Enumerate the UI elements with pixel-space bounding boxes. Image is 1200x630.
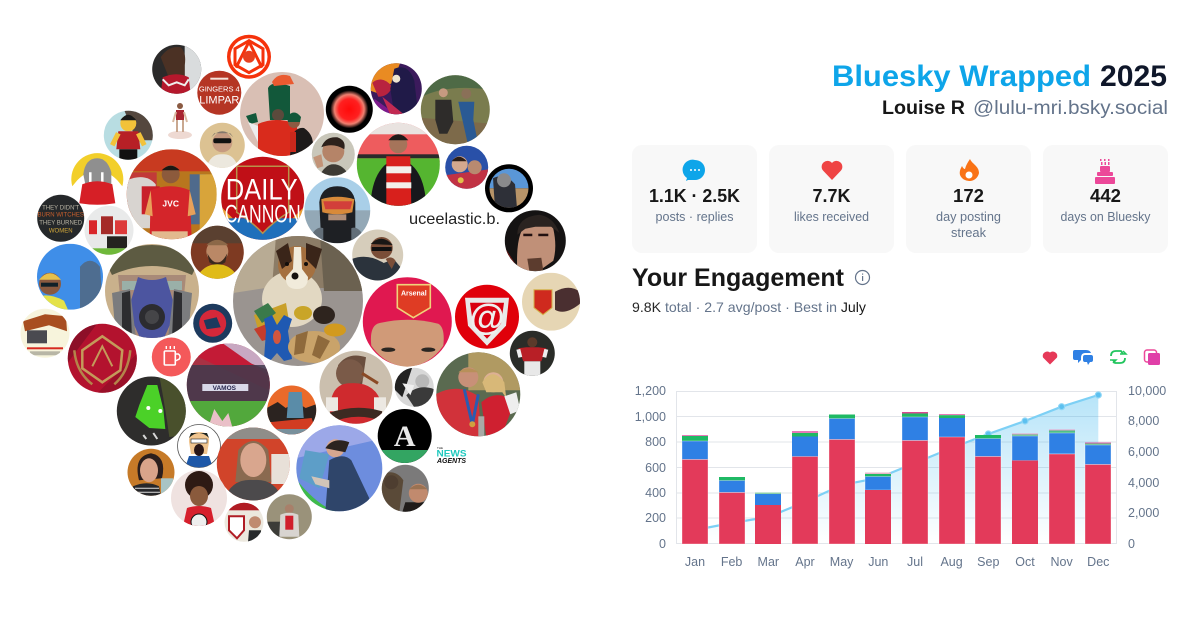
avatar: footballer portrait bbox=[504, 210, 566, 272]
panel: posts and replies bbox=[632, 145, 757, 253]
avatar: Daily Cannon bbox=[221, 156, 305, 240]
month labels: Sep bbox=[977, 555, 999, 569]
avatar: cartoon woman in Arsenal kit bbox=[171, 470, 227, 530]
bar: Dec bbox=[1085, 442, 1111, 544]
engagement summary: 9.8K total · 2.7 avg/post · Best in July bbox=[632, 299, 866, 315]
avatar: cannon crest logo bbox=[227, 35, 271, 79]
panel: likes received: 7.7K bbox=[812, 186, 850, 206]
bar: Nov bbox=[1049, 430, 1075, 544]
avatar: purple painted couple bbox=[370, 62, 422, 115]
avatar: man with Arsenal scarf in stadium bbox=[356, 122, 440, 206]
avatar: beige egg with crest bbox=[522, 273, 580, 331]
panel: posts and replies: posts · replies bbox=[656, 209, 734, 224]
avatar: man in respirator mask bbox=[105, 244, 199, 338]
month labels: Aug bbox=[940, 555, 963, 569]
avatar: navy badge bbox=[193, 304, 232, 343]
avatar: woman with red and grey background bbox=[216, 427, 290, 501]
bar: Mar bbox=[755, 492, 781, 544]
avatar: at-sign crest bbox=[455, 285, 519, 349]
user name and handle: Louise R bbox=[882, 98, 965, 119]
avatar: stadium banner: VAMOS bbox=[213, 385, 237, 392]
panel: day posting streak: 172 bbox=[953, 186, 984, 206]
month labels: Mar bbox=[758, 555, 779, 569]
left axis labels: 200 bbox=[645, 511, 666, 525]
avatar: witches poster: THEY DIDN'T bbox=[42, 205, 80, 211]
panel: likes received: likes received bbox=[794, 209, 869, 224]
avatar: shouting cartoon man bbox=[178, 424, 220, 468]
avatar: team with dog bbox=[84, 205, 134, 256]
engagement chart bbox=[635, 384, 1166, 569]
panel: days on Bluesky bbox=[1043, 145, 1168, 253]
avatar: two hikers bbox=[420, 75, 490, 145]
grid bbox=[676, 391, 1116, 544]
avatar: witches poster: BURN WITCHES bbox=[38, 212, 84, 218]
avatar: The News Agents bbox=[436, 446, 466, 465]
avatar: couple with medal bbox=[435, 351, 521, 437]
avatar: smiling man bbox=[311, 132, 355, 176]
icon: chat bubble bbox=[683, 160, 705, 181]
bar: Jun bbox=[865, 472, 891, 544]
panel: day posting streak bbox=[906, 145, 1031, 253]
month labels: Jun bbox=[868, 555, 888, 569]
avatar: Daily Cannon: DAILY bbox=[226, 173, 298, 206]
avatar: crowd, man in JVC shirt: JVC bbox=[162, 198, 179, 208]
clipped handle label: uceelastic.b. bbox=[409, 211, 500, 228]
avatar: man in sunglasses bbox=[199, 122, 245, 168]
avatar: bearded man in yellow bbox=[190, 225, 244, 279]
avatar: otter smoking a cigar bbox=[319, 350, 393, 424]
avatar: green leaf face bbox=[116, 376, 186, 446]
avatar cloud bbox=[20, 35, 580, 542]
avatar: child in Arsenal hat: Arsenal bbox=[401, 291, 427, 298]
month labels: Feb bbox=[721, 555, 742, 569]
avatar: witches poster bbox=[37, 194, 85, 242]
cumulative area and line bbox=[695, 392, 1101, 544]
icon: flame bbox=[960, 159, 979, 181]
panel: days on Bluesky: 442 bbox=[1090, 186, 1121, 206]
bar: Oct bbox=[1012, 434, 1038, 544]
avatar: The News Agents: NEWS bbox=[436, 448, 466, 460]
avatar: black ring with dog bbox=[485, 164, 533, 212]
avatar: The News Agents: AGENTS bbox=[436, 458, 466, 465]
right axis labels: 4,000 bbox=[1128, 476, 1159, 490]
icon: replies bbox=[1073, 350, 1093, 365]
user name and handle bbox=[882, 98, 1168, 119]
bar: Aug bbox=[939, 414, 965, 544]
icon: heart bbox=[822, 161, 842, 180]
panel: likes received bbox=[769, 145, 894, 253]
avatar: man with glasses leaning bbox=[352, 229, 404, 281]
right axis labels: 8,000 bbox=[1128, 414, 1159, 428]
panel: day posting streak: day posting bbox=[936, 209, 1001, 224]
avatar: witches poster: WOMEN bbox=[49, 228, 73, 234]
avatar: retro newspaper tiger bbox=[20, 308, 70, 358]
month labels: Jan bbox=[685, 555, 705, 569]
icon: birthday cake bbox=[1095, 159, 1115, 184]
avatar: subbuteo figure bbox=[168, 103, 192, 139]
icon: like heart bbox=[1043, 352, 1057, 364]
left axis labels: 400 bbox=[645, 486, 666, 500]
panel: posts and replies: 1.1K · 2.5K bbox=[649, 186, 740, 206]
avatar: at-sign crest: @ bbox=[469, 297, 505, 338]
title: Bluesky Wrapped bbox=[832, 60, 1091, 93]
avatar: skier with goggles bbox=[304, 177, 370, 243]
bar: Jul bbox=[902, 412, 928, 544]
month labels: Jul bbox=[907, 555, 923, 569]
panel: days on Bluesky: days on Bluesky bbox=[1060, 209, 1151, 224]
icon: repost bbox=[1110, 351, 1126, 363]
right axis labels: 6,000 bbox=[1128, 445, 1159, 459]
left axis labels: 0 bbox=[659, 537, 666, 551]
avatar: stadium banner bbox=[186, 343, 270, 429]
bar: Apr bbox=[792, 431, 818, 544]
avatar: burgundy crest fabric bbox=[67, 323, 137, 393]
avatar: crowd, man in JVC shirt bbox=[127, 149, 217, 241]
chart legend icons bbox=[1043, 350, 1160, 365]
bar: Jan bbox=[682, 435, 708, 544]
left axis labels: 1,200 bbox=[635, 384, 666, 398]
bar: May bbox=[829, 414, 855, 544]
left axis labels: 800 bbox=[645, 435, 666, 449]
stacked bars bbox=[682, 412, 1111, 544]
avatar: coffee mug bbox=[152, 338, 191, 376]
bar: Feb bbox=[719, 477, 745, 544]
avatar: woman in bluebells bbox=[295, 424, 383, 512]
panel: day posting streak: streak bbox=[951, 225, 986, 240]
avatar: two women with medals bbox=[445, 145, 489, 189]
avatar: black and white photo bbox=[394, 367, 434, 407]
right axis labels: 10,000 bbox=[1128, 384, 1166, 398]
avatar: Gunnersaurus mascot bbox=[240, 72, 324, 156]
month labels: Apr bbox=[795, 555, 815, 569]
avatar: child in Arsenal hat bbox=[363, 277, 452, 367]
avatar: witches poster: THEY BURNED bbox=[39, 220, 83, 226]
right axis labels bbox=[1128, 384, 1166, 551]
avatar: Gingers 4 Limpar: GINGERS 4 bbox=[199, 85, 240, 94]
avatar: The News Agents: THE bbox=[437, 446, 443, 450]
avatar: orange comic art bbox=[267, 385, 317, 435]
month labels: Nov bbox=[1050, 555, 1073, 569]
left axis labels: 1,000 bbox=[635, 410, 666, 424]
avatar: Gingers 4 Limpar bbox=[197, 71, 241, 115]
month labels bbox=[685, 555, 1109, 569]
avatar: The Athletic A bbox=[378, 409, 432, 463]
avatar: lego minifig bbox=[103, 110, 153, 161]
left axis labels bbox=[635, 384, 666, 551]
title: 2025 bbox=[1100, 60, 1167, 93]
month labels: Dec bbox=[1087, 555, 1109, 569]
avatar: Daily Cannon: CANNON bbox=[225, 200, 301, 228]
bar: Sep bbox=[975, 435, 1001, 544]
avatar: Thierry Henry in kit bbox=[509, 330, 555, 377]
avatar: man with Arsenal crest bbox=[224, 502, 264, 542]
avatar: fan selfie in mirror bbox=[266, 494, 312, 540]
avatar: red glow disc bbox=[326, 86, 373, 133]
avatar: woman on orange wood bbox=[127, 448, 175, 496]
avatar: man in blue sky bbox=[37, 244, 103, 310]
avatar: Gingers 4 Limpar: LIMPAR bbox=[199, 95, 239, 107]
avatar: dog in red shirt bbox=[152, 44, 203, 94]
icon: quotes bbox=[1144, 350, 1160, 365]
avatar: walrus on yellow bbox=[71, 153, 123, 205]
avatar: man with dog bbox=[381, 464, 429, 512]
avatar: Jack Russell with toys (largest) bbox=[233, 236, 363, 366]
left axis labels: 600 bbox=[645, 461, 666, 475]
heading: Your Engagement: Your Engagement bbox=[632, 264, 845, 292]
user name and handle: @lulu-mri.bsky.social bbox=[973, 98, 1168, 119]
right axis labels: 2,000 bbox=[1128, 506, 1159, 520]
avatar: The Athletic A: A bbox=[394, 420, 416, 453]
right axis labels: 0 bbox=[1128, 537, 1135, 551]
month labels: Oct bbox=[1015, 555, 1035, 569]
month labels: May bbox=[830, 555, 854, 569]
icon: info bbox=[856, 270, 870, 284]
